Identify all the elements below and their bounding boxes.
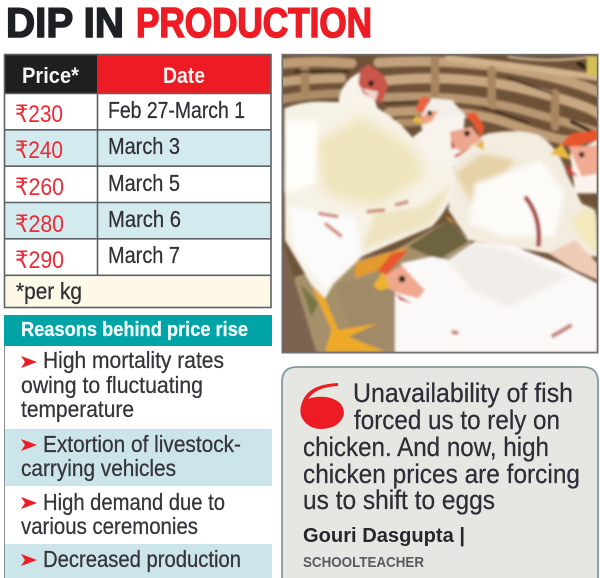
- row: 240: March 3: [108, 133, 180, 159]
- big hen body: [284, 102, 455, 298]
- title: PRODUCTION: [136, 0, 372, 46]
- reason 1: [21, 347, 224, 422]
- quote text: chicken prices are forcing: [303, 459, 580, 489]
- row: 260: [15, 170, 180, 201]
- reasons heading: [4, 315, 272, 346]
- reason 2: [21, 431, 241, 481]
- attribution role: SCHOOLTEACHER: [303, 554, 424, 571]
- row: 280: March 6: [108, 206, 181, 232]
- footnote: *per kg: [16, 278, 82, 304]
- reason 1: owing to fluctuating: [21, 372, 203, 398]
- nest ground: [285, 220, 472, 353]
- panel: reasons behind price rise: [4, 315, 272, 578]
- row: 280: ₹280: [15, 211, 64, 238]
- quote text: [303, 378, 580, 515]
- reason 3: various ceremonies: [21, 513, 198, 539]
- row: 260: March 5: [108, 170, 180, 196]
- front hen: [373, 242, 598, 353]
- hen head: top left: [338, 64, 388, 112]
- title: DIP IN: [6, 0, 124, 46]
- right hen body: [448, 131, 598, 280]
- attribution name: Gouri Dasgupta |: [303, 525, 465, 547]
- icon: red quotation mark: [300, 383, 344, 429]
- reason 2: Extortion of livestock-: [43, 431, 241, 457]
- quote text: Unavailability of fish: [353, 378, 573, 408]
- quote text: chicken. And now, high: [303, 432, 549, 462]
- hen head: far right: [550, 130, 598, 193]
- panel: quote: [282, 367, 598, 578]
- reason 4: Decreased production: [43, 546, 241, 572]
- reason 2: carrying vehicles: [21, 455, 176, 481]
- row: 230: Feb 27-March 1: [108, 97, 245, 123]
- row: 230: ₹230: [15, 101, 63, 128]
- title: [6, 0, 372, 46]
- row: 290: [15, 242, 180, 274]
- reasons heading: Reasons behind price rise: [21, 319, 248, 341]
- reason 1: temperature: [21, 396, 134, 422]
- row: 290: March 7: [108, 242, 180, 268]
- hen head: centre: [413, 112, 484, 170]
- quote text: us to shift to eggs: [303, 485, 495, 515]
- photo: white hens in a bamboo basket: [278, 55, 600, 353]
- reason 1: High mortality rates: [43, 347, 224, 373]
- reason 3: [21, 489, 225, 539]
- table header: price: Price*: [22, 63, 79, 88]
- row: 240: [15, 133, 180, 164]
- row: 230: [15, 97, 245, 128]
- basket weave: [278, 57, 600, 140]
- table header: date: Date: [163, 63, 205, 88]
- price table: [4, 54, 271, 308]
- hen head: middle back: [412, 96, 465, 130]
- hen feet: [312, 215, 460, 352]
- row: 290: ₹290: [15, 247, 64, 274]
- reason 3: High demand due to: [43, 489, 225, 515]
- table header: date: [97, 54, 271, 93]
- row: 280: [15, 206, 181, 238]
- quote text: forced us to rely on: [354, 405, 560, 435]
- row: 260: ₹260: [15, 174, 64, 201]
- table header: price: [4, 54, 97, 93]
- wooden post: [282, 240, 317, 353]
- row: 240: ₹240: [15, 137, 63, 164]
